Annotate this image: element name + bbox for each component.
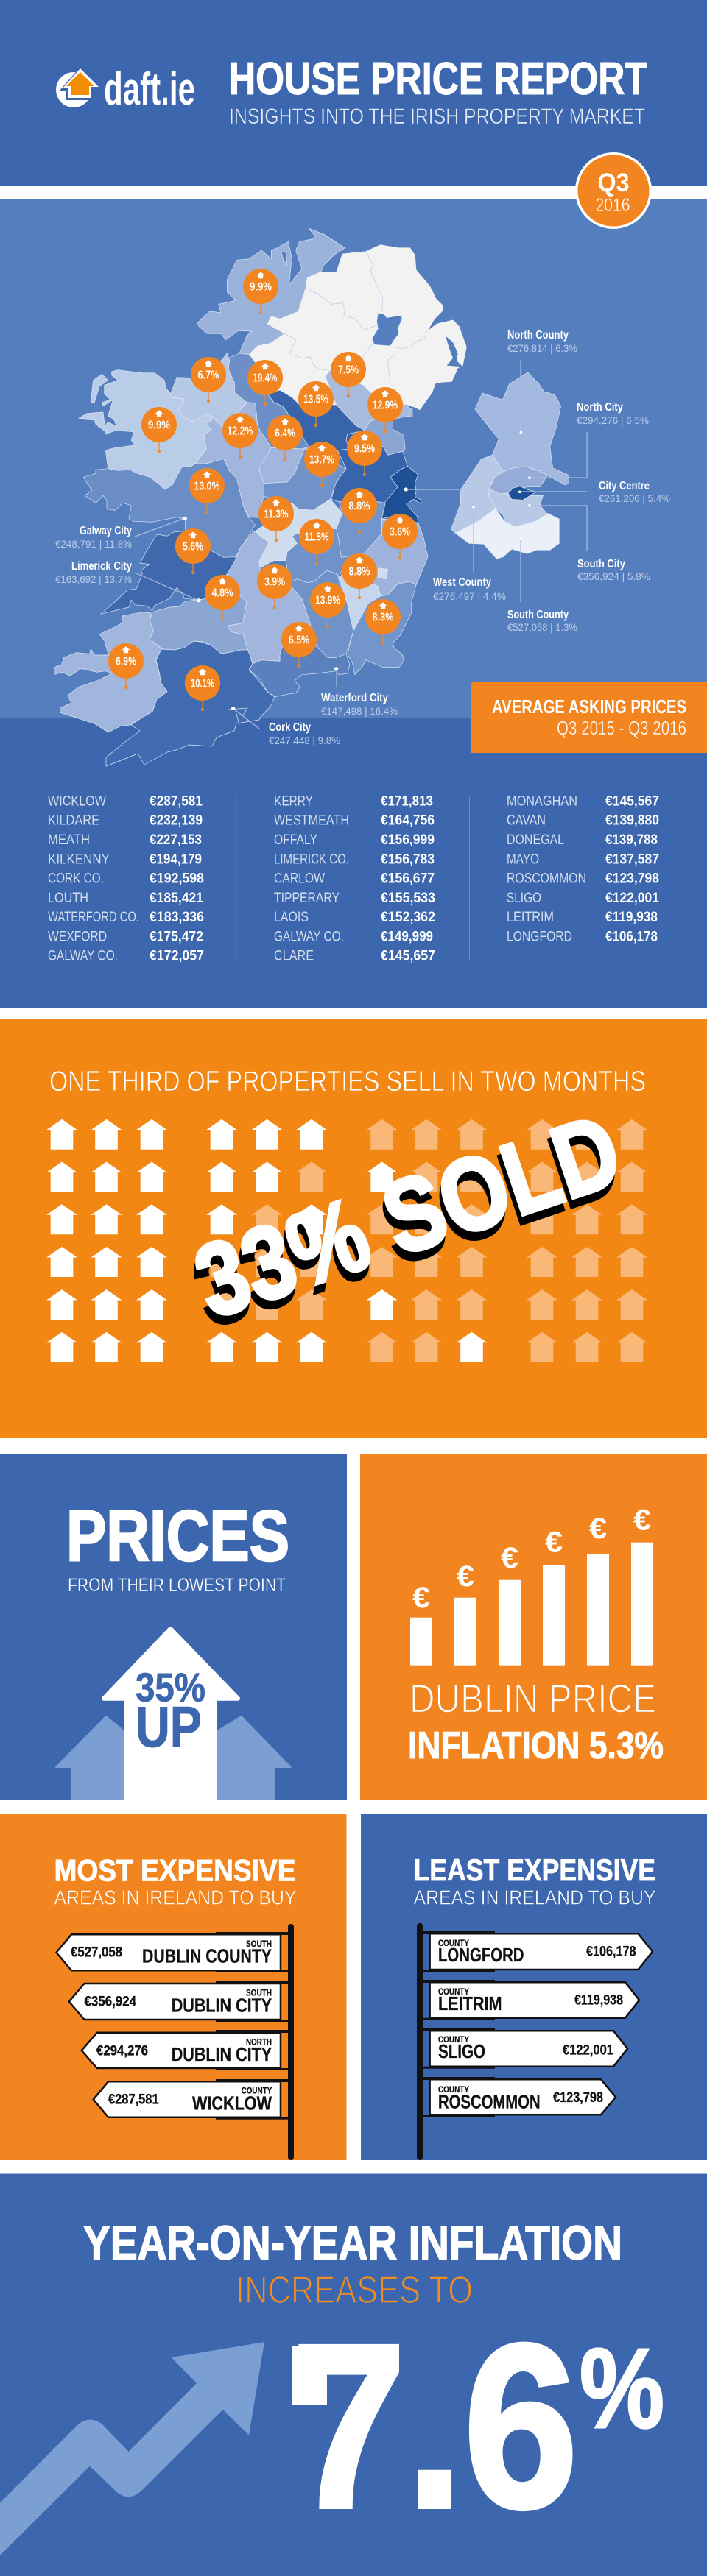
pin: Donegal 9.9% bbox=[243, 269, 278, 314]
pin: Wexford 8.3% bbox=[365, 599, 401, 645]
sign: County Leitrim bbox=[423, 1980, 639, 2020]
big number: 7.6: 7.6 bbox=[292, 2296, 578, 2557]
sign: County Leitrim: €119,938 bbox=[574, 1992, 623, 2008]
table column 1: WICKLOW bbox=[48, 793, 106, 809]
icon: large white arrow bbox=[104, 1629, 238, 1797]
heading: prices: PRICES bbox=[66, 1496, 289, 1576]
sign: County Sligo: €122,001 bbox=[563, 2043, 613, 2059]
map percentage pins bbox=[108, 269, 418, 711]
pin: Tipperary 3.9%: 3.9% bbox=[264, 576, 285, 589]
table column 2: €156,677 bbox=[381, 871, 435, 887]
pin: Clare 5.6%: 5.6% bbox=[183, 540, 203, 553]
pin: Donegal 9.9%: 9.9% bbox=[250, 281, 272, 293]
caption: increases to: INCREASES TO bbox=[236, 2269, 473, 2312]
table column 2: €156,783 bbox=[381, 852, 435, 867]
sign: County Wicklow: WICKLOW bbox=[192, 2092, 272, 2115]
pin: Cavan 13.5%: 13.5% bbox=[303, 393, 328, 406]
chart: euro bars: € bbox=[457, 1560, 474, 1593]
pin: Westmeath 13.7% bbox=[304, 442, 340, 487]
sign: South Dublin County bbox=[56, 1932, 288, 1972]
table column 2: €156,999 bbox=[381, 832, 435, 848]
table column 3: €145,567 bbox=[605, 793, 659, 809]
table column 3: LONGFORD bbox=[507, 929, 572, 944]
chart: euro bars: € bbox=[412, 1582, 430, 1614]
stamp: 33% sold: 33% SOLD bbox=[180, 1100, 633, 1349]
table column 2: €155,533 bbox=[381, 891, 435, 906]
sign: South Dublin County: SOUTH bbox=[246, 1939, 272, 1949]
Dublin North City bbox=[489, 467, 547, 494]
chart: euro bars: € bbox=[545, 1526, 563, 1559]
label: South City: €356,924 | 5.8% bbox=[577, 570, 650, 582]
table column 2: €164,756 bbox=[381, 813, 435, 829]
chart: euro bars: € bbox=[633, 1504, 651, 1537]
table column 1: €192,598 bbox=[150, 871, 204, 887]
big number: percent sign: % bbox=[580, 2325, 664, 2452]
pin: Waterford 6.5%: 6.5% bbox=[289, 634, 309, 646]
label: West County: €276,497 | 4.4% bbox=[433, 590, 506, 602]
table column 1: WEXFORD bbox=[48, 929, 107, 944]
pin: Kilkenny 13.9% bbox=[310, 582, 345, 628]
table column 1: MEATH bbox=[48, 832, 90, 848]
table column 3: €106,178 bbox=[605, 929, 658, 944]
county regions west bbox=[79, 353, 247, 489]
sign: County Sligo: SLIGO bbox=[438, 2040, 485, 2062]
table column 2 bbox=[274, 793, 435, 964]
table column 3: SLIGO bbox=[507, 891, 541, 906]
pin: Sligo 6.7% bbox=[191, 357, 226, 403]
pin: Louth 12.9%: 12.9% bbox=[373, 399, 398, 412]
Q3 2016 badge bbox=[575, 152, 652, 229]
table column 3: €122,001 bbox=[605, 891, 659, 906]
sign: County Wicklow bbox=[94, 2079, 288, 2120]
label: West County: West County bbox=[433, 576, 491, 589]
panel: Dublin price inflation bbox=[360, 1454, 707, 1800]
table column 2: €152,362 bbox=[381, 910, 435, 925]
county regions midlands and south-east bbox=[227, 449, 428, 697]
pin: Kildare 8.8%: 8.8% bbox=[349, 500, 370, 512]
pin: Offaly 11.3% bbox=[258, 496, 294, 542]
sign: County Roscommon: €123,798 bbox=[553, 2090, 603, 2106]
signpost pole bbox=[288, 1924, 294, 2160]
pin: Roscommon 12.2% bbox=[222, 413, 258, 459]
Q3 2016 badge: 2016 bbox=[595, 195, 630, 216]
sign: County Roscommon bbox=[423, 2077, 616, 2117]
label: City Centre bbox=[599, 480, 670, 504]
sign: County Longford: COUNTY bbox=[438, 1938, 469, 1948]
Dublin West County bbox=[451, 455, 503, 533]
label: Waterford City: Waterford City bbox=[321, 692, 388, 704]
pin: Cork 10.1% bbox=[185, 665, 220, 711]
icon: rising arrow bbox=[0, 2342, 264, 2555]
map panel background bbox=[0, 199, 707, 1008]
label: South City bbox=[577, 558, 650, 582]
sign: County Sligo bbox=[423, 2028, 627, 2069]
sign: County Wicklow: €287,581 bbox=[108, 2092, 159, 2107]
icons: sold houses bbox=[46, 1119, 488, 1362]
icons: unsold houses bbox=[206, 1119, 647, 1362]
Dublin City Centre bbox=[508, 486, 536, 500]
Q3 2016 badge: Q3 bbox=[598, 169, 629, 197]
table column 2: LIMERICK CO. bbox=[274, 852, 349, 867]
pin: Galway 13.0%: 13.0% bbox=[194, 480, 220, 493]
table column 3: DONEGAL bbox=[507, 832, 564, 848]
asking price table bbox=[48, 793, 659, 964]
county regions north bbox=[195, 228, 466, 524]
heading: most expensive: MOST EXPENSIVE bbox=[54, 1853, 296, 1888]
sign: North Dublin City: DUBLIN CITY bbox=[172, 2043, 272, 2065]
label: West County bbox=[433, 576, 506, 602]
label: Galway City bbox=[55, 525, 132, 550]
pin: Monaghan 7.5%: 7.5% bbox=[338, 364, 359, 377]
signpost pole bbox=[417, 1923, 423, 2160]
pin: Waterford 6.5% bbox=[281, 622, 317, 668]
label: Waterford City bbox=[321, 692, 398, 717]
pin: Louth 12.9% bbox=[367, 387, 403, 433]
caption: areas to buy: AREAS IN IRELAND TO BUY bbox=[414, 1886, 656, 1909]
label: Limerick City: €163,692 | 13.7% bbox=[55, 573, 132, 585]
pin: Sligo 6.7%: 6.7% bbox=[197, 369, 219, 381]
label: North County: €276,814 | 6.3% bbox=[507, 342, 577, 354]
table column 1: €232,139 bbox=[150, 813, 203, 829]
label: North City: €294,276 | 6.5% bbox=[577, 414, 649, 426]
label: South City: South City bbox=[577, 558, 625, 570]
pin: Limerick 4.8%: 4.8% bbox=[212, 587, 233, 599]
table column 3: LEITRIM bbox=[507, 910, 554, 925]
text: 35%: 35% bbox=[136, 1665, 205, 1710]
sign: South Dublin City: €356,924 bbox=[84, 1995, 136, 2010]
pin: Leitrim 19.4% bbox=[247, 360, 283, 406]
table column 2: CARLOW bbox=[274, 871, 325, 887]
sign: County Longford bbox=[423, 1931, 653, 1972]
icon: light arrows bbox=[56, 1716, 290, 1799]
pin: Wexford 8.3%: 8.3% bbox=[373, 611, 394, 624]
pin: Offaly 11.3%: 11.3% bbox=[264, 508, 289, 521]
table column 2: €171,813 bbox=[381, 793, 433, 809]
heading: year-on-year inflation: YEAR-ON-YEAR INFLATION bbox=[83, 2216, 622, 2270]
pin: Cavan 13.5% bbox=[298, 381, 334, 427]
table column 1: €287,581 bbox=[150, 793, 203, 809]
table column 3: €119,938 bbox=[605, 910, 658, 925]
panel: year-on-year inflation bbox=[0, 2174, 707, 2576]
label: Waterford City: €147,498 | 16.4% bbox=[321, 705, 398, 717]
table column 2: GALWAY CO. bbox=[274, 929, 344, 944]
table column 1: KILDARE bbox=[48, 813, 99, 829]
table column 1: €227,153 bbox=[150, 832, 202, 848]
table column 2: LAOIS bbox=[274, 910, 309, 925]
pin: Leitrim 19.4%: 19.4% bbox=[253, 372, 278, 384]
table column 2: €149,999 bbox=[381, 929, 433, 944]
pin: Monaghan 7.5% bbox=[331, 352, 366, 397]
panel: most expensive areas bbox=[0, 1814, 346, 2160]
sign: South Dublin County: €527,058 bbox=[71, 1945, 122, 1960]
sign: County Wicklow: COUNTY bbox=[242, 2086, 272, 2096]
label: Galway City: €248,791 | 11.8% bbox=[55, 538, 132, 550]
pin: Kilkenny 13.9%: 13.9% bbox=[315, 595, 340, 606]
pin: Kerry 6.9%: 6.9% bbox=[116, 655, 136, 668]
panel: least expensive areas bbox=[361, 1814, 707, 2160]
pin: Longford 6.4% bbox=[267, 415, 303, 461]
table column 1: KILKENNY bbox=[48, 852, 110, 867]
text: inflation 5.3%: INFLATION 5.3% bbox=[408, 1724, 664, 1767]
sign: County Leitrim: COUNTY bbox=[438, 1986, 469, 1997]
label: Limerick City bbox=[55, 560, 132, 585]
pin: Meath 9.5%: 9.5% bbox=[354, 443, 375, 455]
label: North City: North City bbox=[577, 401, 623, 414]
heading: least expensive: LEAST EXPENSIVE bbox=[414, 1853, 655, 1887]
table column 1: €175,472 bbox=[150, 929, 203, 944]
table column 2: TIPPERARY bbox=[274, 891, 340, 906]
label: Galway City: Galway City bbox=[80, 525, 132, 537]
pin: Tipperary 3.9% bbox=[257, 564, 292, 609]
sign: South Dublin City: DUBLIN CITY bbox=[172, 1994, 272, 2016]
pin: Laois 11.5%: 11.5% bbox=[305, 531, 329, 543]
sign: South Dublin County: DUBLIN COUNTY bbox=[142, 1945, 272, 1967]
pin: Mayo 9.9% bbox=[141, 407, 177, 453]
chart: euro bars: € bbox=[501, 1542, 518, 1574]
label: Limerick City: Limerick City bbox=[71, 560, 132, 573]
Cork harbour outline bbox=[228, 708, 247, 725]
city leader lines bbox=[135, 518, 337, 729]
stamp: 33% sold: 33% SOLD bbox=[182, 1091, 634, 1340]
sign: County Roscommon: COUNTY bbox=[438, 2084, 469, 2095]
chart: euro bars: € bbox=[589, 1512, 607, 1545]
table column 1 bbox=[48, 793, 204, 964]
sign: North Dublin City: NORTH bbox=[246, 2037, 272, 2047]
average asking prices box bbox=[471, 682, 707, 753]
pin: Roscommon 12.2%: 12.2% bbox=[227, 425, 253, 437]
table column 3 bbox=[507, 793, 659, 944]
panel: 33% sold bbox=[0, 1019, 707, 1438]
Dublin leader lines and dots bbox=[135, 360, 587, 729]
logo: daft.ie: daft.ie bbox=[104, 64, 195, 115]
table column 1: €185,421 bbox=[150, 891, 203, 906]
label: North County: North County bbox=[507, 329, 569, 342]
Dublin inset map bbox=[451, 372, 569, 559]
table column 2: WESTMEATH bbox=[274, 813, 349, 829]
table column 1: CORK CO. bbox=[48, 871, 104, 887]
sign: County Leitrim: LEITRIM bbox=[438, 1992, 502, 2014]
sign: South Dublin City bbox=[69, 1981, 288, 2022]
header band bbox=[0, 0, 707, 186]
sign: County Longford: €106,178 bbox=[586, 1944, 636, 1959]
county Cork bbox=[106, 641, 275, 766]
table column 1: GALWAY CO. bbox=[48, 949, 118, 964]
sign: North Dublin City bbox=[82, 2030, 288, 2070]
caption: areas to buy: AREAS IN IRELAND TO BUY bbox=[54, 1886, 297, 1909]
Dublin South County bbox=[455, 509, 559, 559]
label: South County: €527,058 | 1.3% bbox=[507, 621, 577, 633]
table column 3: MONAGHAN bbox=[507, 793, 577, 809]
sign: County Longford: LONGFORD bbox=[438, 1944, 524, 1966]
table column 1: €183,336 bbox=[150, 910, 204, 925]
table column 1: €172,057 bbox=[150, 949, 204, 964]
white divider band bbox=[0, 186, 707, 199]
pin: Wicklow 3.6%: 3.6% bbox=[390, 526, 410, 539]
caption: from their lowest point: FROM THEIR LOWEST POINT bbox=[68, 1575, 286, 1596]
label: Cork City: Cork City bbox=[269, 721, 311, 734]
pin: Wicklow 3.6% bbox=[382, 514, 418, 559]
label: South County bbox=[507, 609, 577, 633]
pin: Kildare 8.8% bbox=[342, 488, 377, 534]
label: North City bbox=[577, 401, 649, 426]
pin: Westmeath 13.7%: 13.7% bbox=[309, 453, 334, 467]
pin: Limerick 4.8% bbox=[205, 575, 240, 620]
chart: euro bars bbox=[410, 1504, 653, 1666]
table column 3: €137,587 bbox=[605, 852, 659, 867]
label: City Centre: €261,206 | 5.4% bbox=[599, 492, 670, 504]
pin: Mayo 9.9%: 9.9% bbox=[148, 420, 170, 431]
table column 3: ROSCOMMON bbox=[507, 871, 586, 887]
pin: Clare 5.6% bbox=[175, 528, 211, 574]
label: North County bbox=[507, 329, 577, 354]
label: South County: South County bbox=[507, 609, 569, 621]
table column 3: €139,788 bbox=[605, 832, 658, 848]
table column 3: €139,880 bbox=[605, 813, 659, 829]
pin: Cork 10.1%: 10.1% bbox=[191, 677, 214, 690]
text: UP: UP bbox=[136, 1694, 202, 1759]
map of Ireland bbox=[54, 228, 466, 766]
table column 1: €194,179 bbox=[150, 852, 202, 867]
table column 2: CLARE bbox=[274, 949, 314, 964]
table column 3: €123,798 bbox=[605, 871, 659, 887]
pin: Galway 13.0% bbox=[189, 468, 225, 514]
pin: Longford 6.4%: 6.4% bbox=[275, 427, 295, 440]
table column 3: MAYO bbox=[507, 852, 539, 867]
pin: Carlow 8.8% bbox=[342, 553, 377, 599]
sign: North Dublin City: €294,276 bbox=[96, 2043, 148, 2059]
sign: County Roscommon: ROSCOMMON bbox=[438, 2090, 541, 2112]
pin: Carlow 8.8%: 8.8% bbox=[349, 565, 370, 578]
logo: daft.ie bbox=[56, 64, 195, 115]
table column 2: OFFALY bbox=[274, 832, 317, 848]
sign: South Dublin City: SOUTH bbox=[246, 1988, 272, 1998]
table column 1: WATERFORD CO. bbox=[48, 910, 139, 925]
map labels bbox=[55, 329, 670, 746]
Dublin South City bbox=[488, 489, 547, 527]
pin: Kerry 6.9% bbox=[108, 643, 144, 689]
table column 2: €145,657 bbox=[381, 949, 435, 964]
sign: County Sligo: COUNTY bbox=[438, 2034, 469, 2045]
label: City Centre: City Centre bbox=[599, 480, 650, 492]
table column 1: LOUTH bbox=[48, 891, 88, 906]
panel: prices from lowest point bbox=[0, 1454, 347, 1800]
Dublin North County bbox=[475, 372, 569, 485]
text: Dublin price: DUBLIN PRICE bbox=[409, 1676, 656, 1722]
county regions mid-west and south-west bbox=[54, 459, 256, 732]
pin: Laois 11.5% bbox=[299, 519, 334, 565]
table column 3: CAVAN bbox=[507, 813, 546, 829]
pin: Meath 9.5% bbox=[347, 431, 382, 476]
label: Cork City bbox=[269, 721, 340, 746]
table column 2: KERRY bbox=[274, 793, 313, 809]
label: Cork City: €247,448 | 9.8% bbox=[269, 735, 340, 746]
